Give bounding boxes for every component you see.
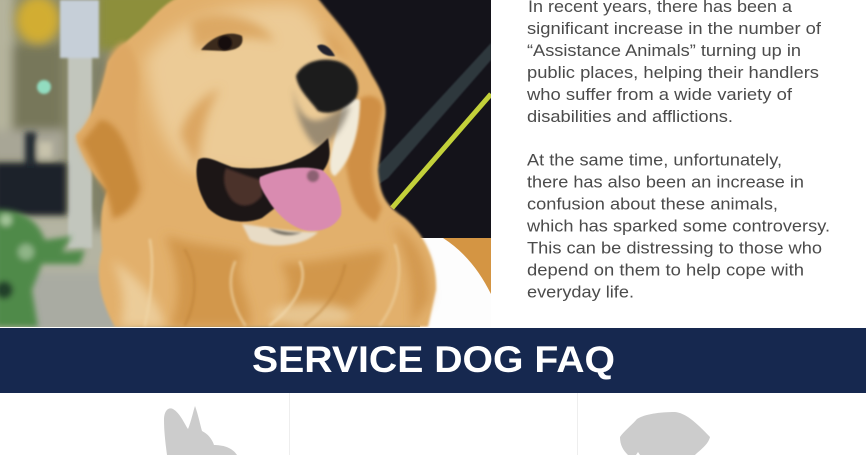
dog fur body and head [76,0,436,327]
intro text: significant increase in the number of [527,20,821,38]
tongue [259,168,341,231]
icon: german shepherd silhouette [164,406,237,455]
intro text: who suffer from a wide variety of [526,86,792,104]
photo background: blurred street [0,0,420,327]
intro text: At the same time, unfortunately, [527,152,782,170]
handler: dark clothing [312,0,491,240]
left eye [201,34,242,51]
white vest and orange fur [420,238,491,327]
chin [242,224,318,246]
muzzle cream side [330,95,360,176]
foliage [16,0,60,44]
intro text: there has also been an increase in [527,174,804,192]
yellow leash [392,94,491,208]
left ear [74,40,142,194]
intro text: disabilities and afflictions. [527,108,733,126]
right eye [317,44,335,56]
banner: Service Dog FAQ [0,328,866,393]
intro text: “Assistance Animals” turning up in [527,42,801,60]
title: SERVICE DOG FAQ [252,339,615,380]
green light [37,80,51,94]
chest tone shading [165,225,430,327]
muzzle grey shade [292,85,350,148]
icon: dog head silhouette [620,412,710,455]
intro text: everyday life. [527,284,634,302]
intro text: depend on them to help cope with [527,262,804,280]
fur strands [145,240,399,325]
intro text: which has sparked some controversy. [526,218,830,236]
plant [0,210,85,327]
pole [60,0,99,248]
nose [296,60,358,113]
mouth [196,138,330,222]
photo: golden retriever service dog [0,0,491,337]
intro text: public places, helping their handlers [527,64,819,82]
brow and cheek shading [180,15,350,170]
right ear [346,96,382,222]
head tone [145,4,346,180]
intro text: confusion about these animals, [527,196,778,214]
intro text [526,0,830,302]
intro text: This can be distressing to those who [527,240,822,258]
strap [374,43,491,186]
dark bin [0,132,66,215]
